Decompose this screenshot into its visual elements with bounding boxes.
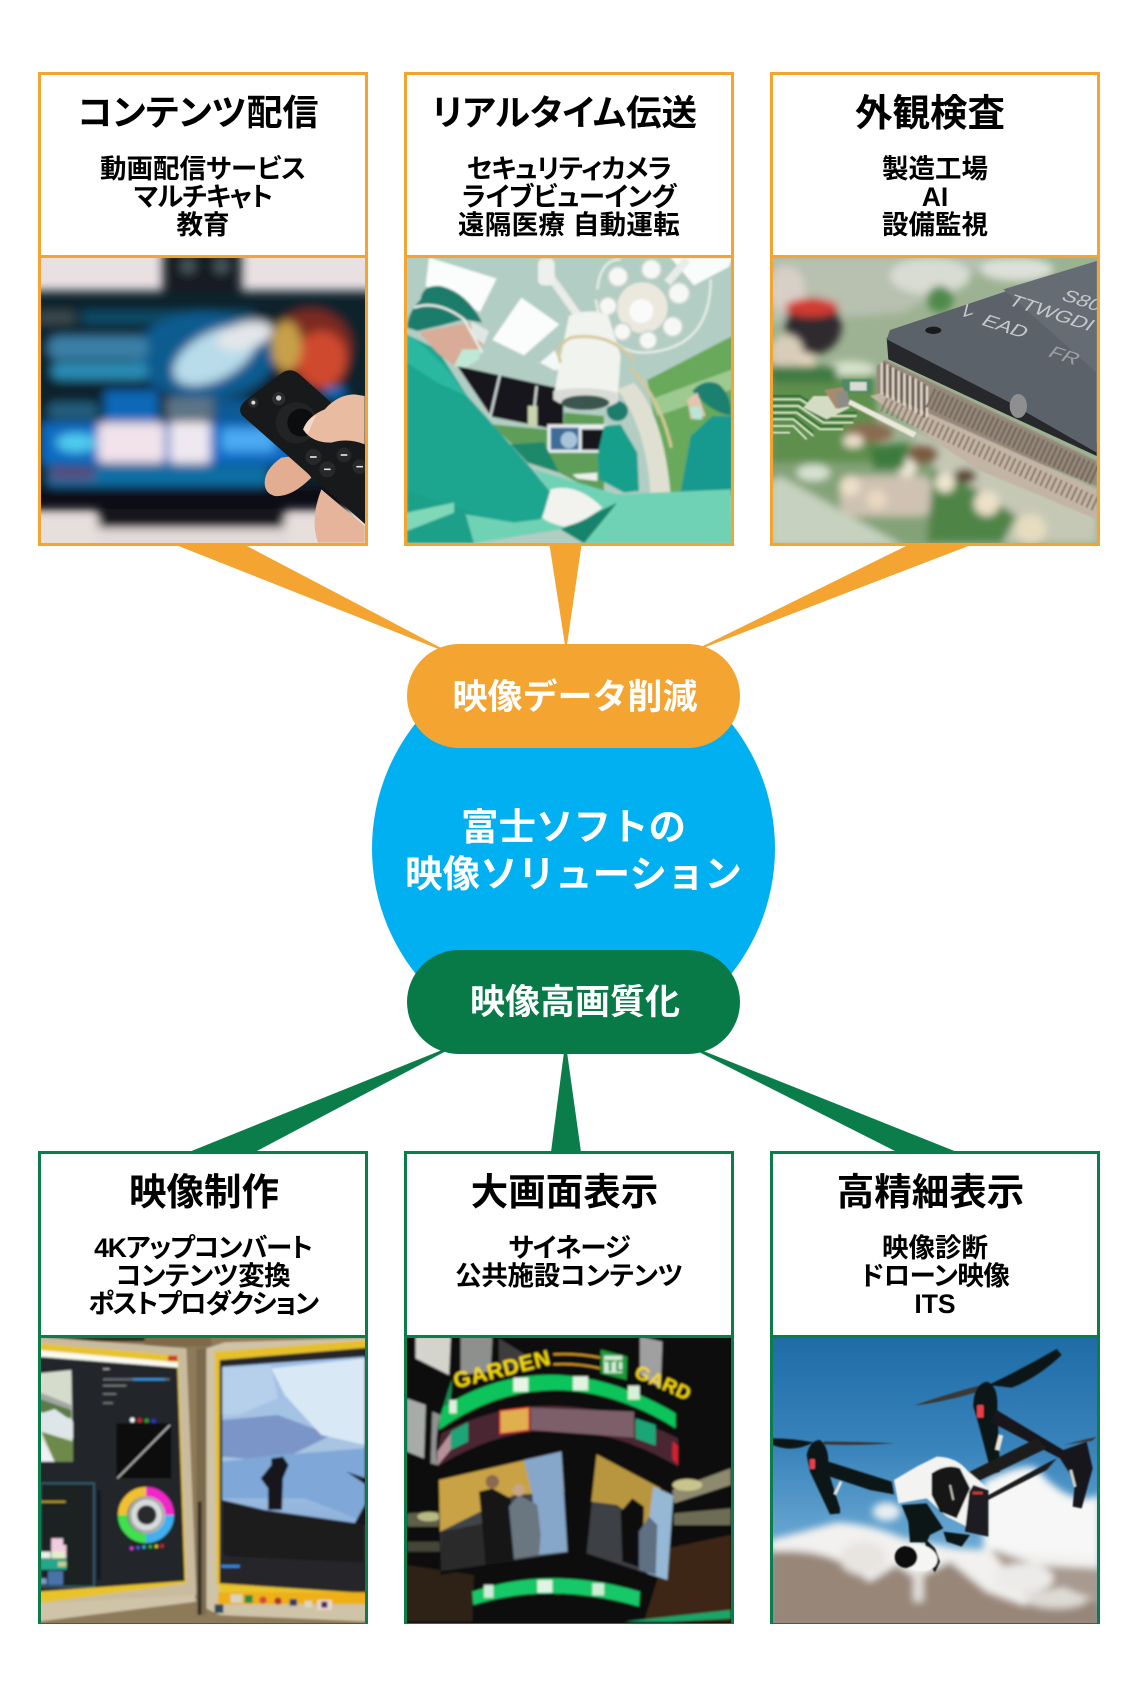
pill: video data reduction [407, 644, 740, 748]
description [455, 1233, 683, 1291]
heading: 大画面表示 [471, 1171, 658, 1213]
panel: video production [38, 1151, 368, 1624]
central title text [405, 806, 742, 895]
heading: コンテンツ配信 [78, 92, 318, 133]
description: サイネージ [508, 1233, 630, 1263]
bottom ring [472, 1578, 640, 1607]
pill: video quality enhancement: 映像高画質化 [470, 983, 680, 1022]
description: セキュリティカメラ [467, 154, 671, 184]
left monitor [38, 1337, 196, 1620]
lamp [596, 259, 711, 353]
central title text: 映像ソリューション [405, 853, 742, 895]
body [894, 1457, 988, 1528]
sign lettering [601, 1350, 627, 1380]
pins [877, 360, 1097, 486]
green band [439, 1375, 676, 1430]
propellers [914, 1385, 983, 1406]
photo: arena scoreboard: GARD [631, 1362, 694, 1405]
description: 遠隔医療 自動運転 [458, 210, 680, 240]
description: 公共施設コンテンツ [455, 1261, 683, 1291]
central title text: 富士ソフトの [461, 806, 686, 848]
thumb [303, 394, 365, 444]
photo: TV remote [41, 255, 365, 543]
heading: 外観検査 [855, 92, 1005, 134]
photo: arena scoreboard: TD [605, 1357, 627, 1376]
photo: circuit board chip: TTWGDI [1004, 292, 1097, 335]
description: 映像診断 [882, 1233, 988, 1263]
traces [773, 399, 857, 439]
description: ドローン映像 [861, 1261, 1009, 1291]
description: 動画配信サービス [100, 154, 306, 184]
orange wedges from top panels to pill [176, 545, 971, 650]
photo: drone [773, 1335, 1097, 1623]
remote [240, 370, 368, 527]
description: 設備監視 [882, 210, 988, 240]
chip marking: L [961, 298, 977, 322]
description [88, 1233, 319, 1319]
panel: high definition display [770, 1151, 1100, 1624]
color wheel [123, 1492, 169, 1538]
heading: 映像制作 [129, 1171, 279, 1213]
fingers [265, 456, 311, 496]
camera [897, 1541, 940, 1575]
panel: content delivery [38, 72, 368, 546]
description: AI [922, 182, 948, 212]
front surgeon [407, 334, 552, 523]
photo: arena scoreboard [407, 1335, 731, 1623]
pill: video data reduction: 映像データ削減 [452, 678, 698, 717]
description: ライブビューイング [462, 182, 676, 212]
legs highlights [997, 1435, 1001, 1450]
description: ITS [914, 1289, 956, 1319]
photo: circuit board chip: EAD [977, 312, 1033, 342]
description [458, 154, 680, 240]
screens [439, 1452, 568, 1571]
description: 教育 [176, 210, 230, 240]
central blue circle [372, 646, 775, 1050]
photo: circuit board chip [773, 255, 1097, 543]
arms [973, 1382, 1000, 1474]
photo: arena scoreboard: GARDEN [451, 1345, 553, 1393]
drum [436, 1381, 677, 1575]
scoreboard band [437, 1406, 678, 1467]
heading: 高精細表示 [837, 1171, 1024, 1213]
green wedges from pill to bottom panels [189, 1050, 957, 1152]
heading: リアルタイム伝送 [432, 93, 697, 133]
description [861, 1233, 1010, 1319]
photo: circuit board chip: FR [1044, 344, 1084, 369]
description: 製造工場 [882, 154, 988, 184]
description: コンテンツ変換 [116, 1261, 290, 1291]
pill: video quality enhancement [407, 950, 740, 1054]
right monitor [206, 1338, 368, 1622]
panel: visual inspection [770, 72, 1100, 546]
description [100, 154, 306, 240]
description: マルチキャト [134, 182, 272, 212]
description: 4Kアップコンバート [94, 1233, 312, 1263]
drape [466, 469, 732, 543]
photo: operating room [407, 255, 731, 543]
panel: large screen display [404, 1151, 734, 1624]
panel: realtime transmission [404, 72, 734, 546]
chip body [887, 338, 1097, 456]
description [882, 154, 988, 240]
photo: editing monitors [41, 1335, 365, 1623]
description: ポストプロダクション [88, 1289, 318, 1319]
